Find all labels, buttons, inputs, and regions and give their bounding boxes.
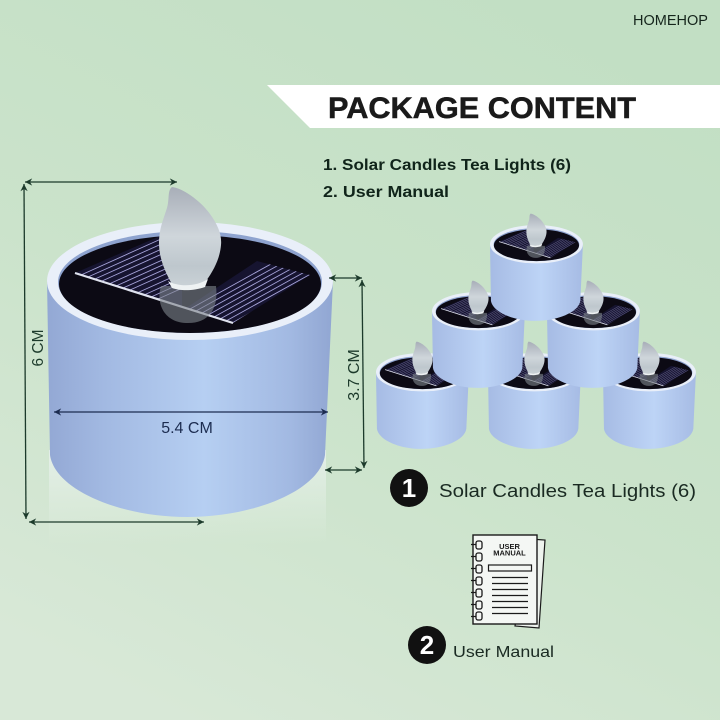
contents list: 1. Solar Candles Tea Lights (6) xyxy=(323,157,571,174)
label 1: candles xyxy=(390,469,696,507)
label 1: candles: Solar Candles Tea Lights (6) xyxy=(439,481,696,501)
candle: top xyxy=(490,214,583,321)
label 2: user manual: User Manual xyxy=(453,644,554,661)
brand logo: HOMEHOP xyxy=(633,12,708,29)
label 2: user manual: 2 xyxy=(420,630,434,660)
dimension: 6 cm height: 6 CM xyxy=(30,329,47,367)
contents list xyxy=(323,157,571,201)
heading banner: PACKAGE CONTENT xyxy=(328,92,636,125)
label 1: candles: 1 xyxy=(402,473,416,503)
dimension: 5.4 cm diameter: 5.4 CM xyxy=(161,420,213,437)
heading banner xyxy=(267,85,720,128)
dimension: 3.7 cm height: 3.7 CM xyxy=(346,349,363,401)
label 2: user manual xyxy=(408,626,554,664)
icon: user manual: MANUAL xyxy=(493,548,526,558)
contents list: 2. User Manual xyxy=(323,184,449,201)
candle: middle right xyxy=(547,281,640,388)
candle: middle left xyxy=(432,281,525,388)
icon: user manual xyxy=(471,535,545,628)
candle: bottom right xyxy=(603,342,696,449)
reflection under large candle xyxy=(49,450,326,545)
candle: bottom centre xyxy=(488,342,581,449)
icon: user manual: USER xyxy=(499,542,520,551)
pyramid of six candles xyxy=(376,214,696,449)
large candle xyxy=(47,187,333,517)
candle: bottom left xyxy=(376,342,469,449)
